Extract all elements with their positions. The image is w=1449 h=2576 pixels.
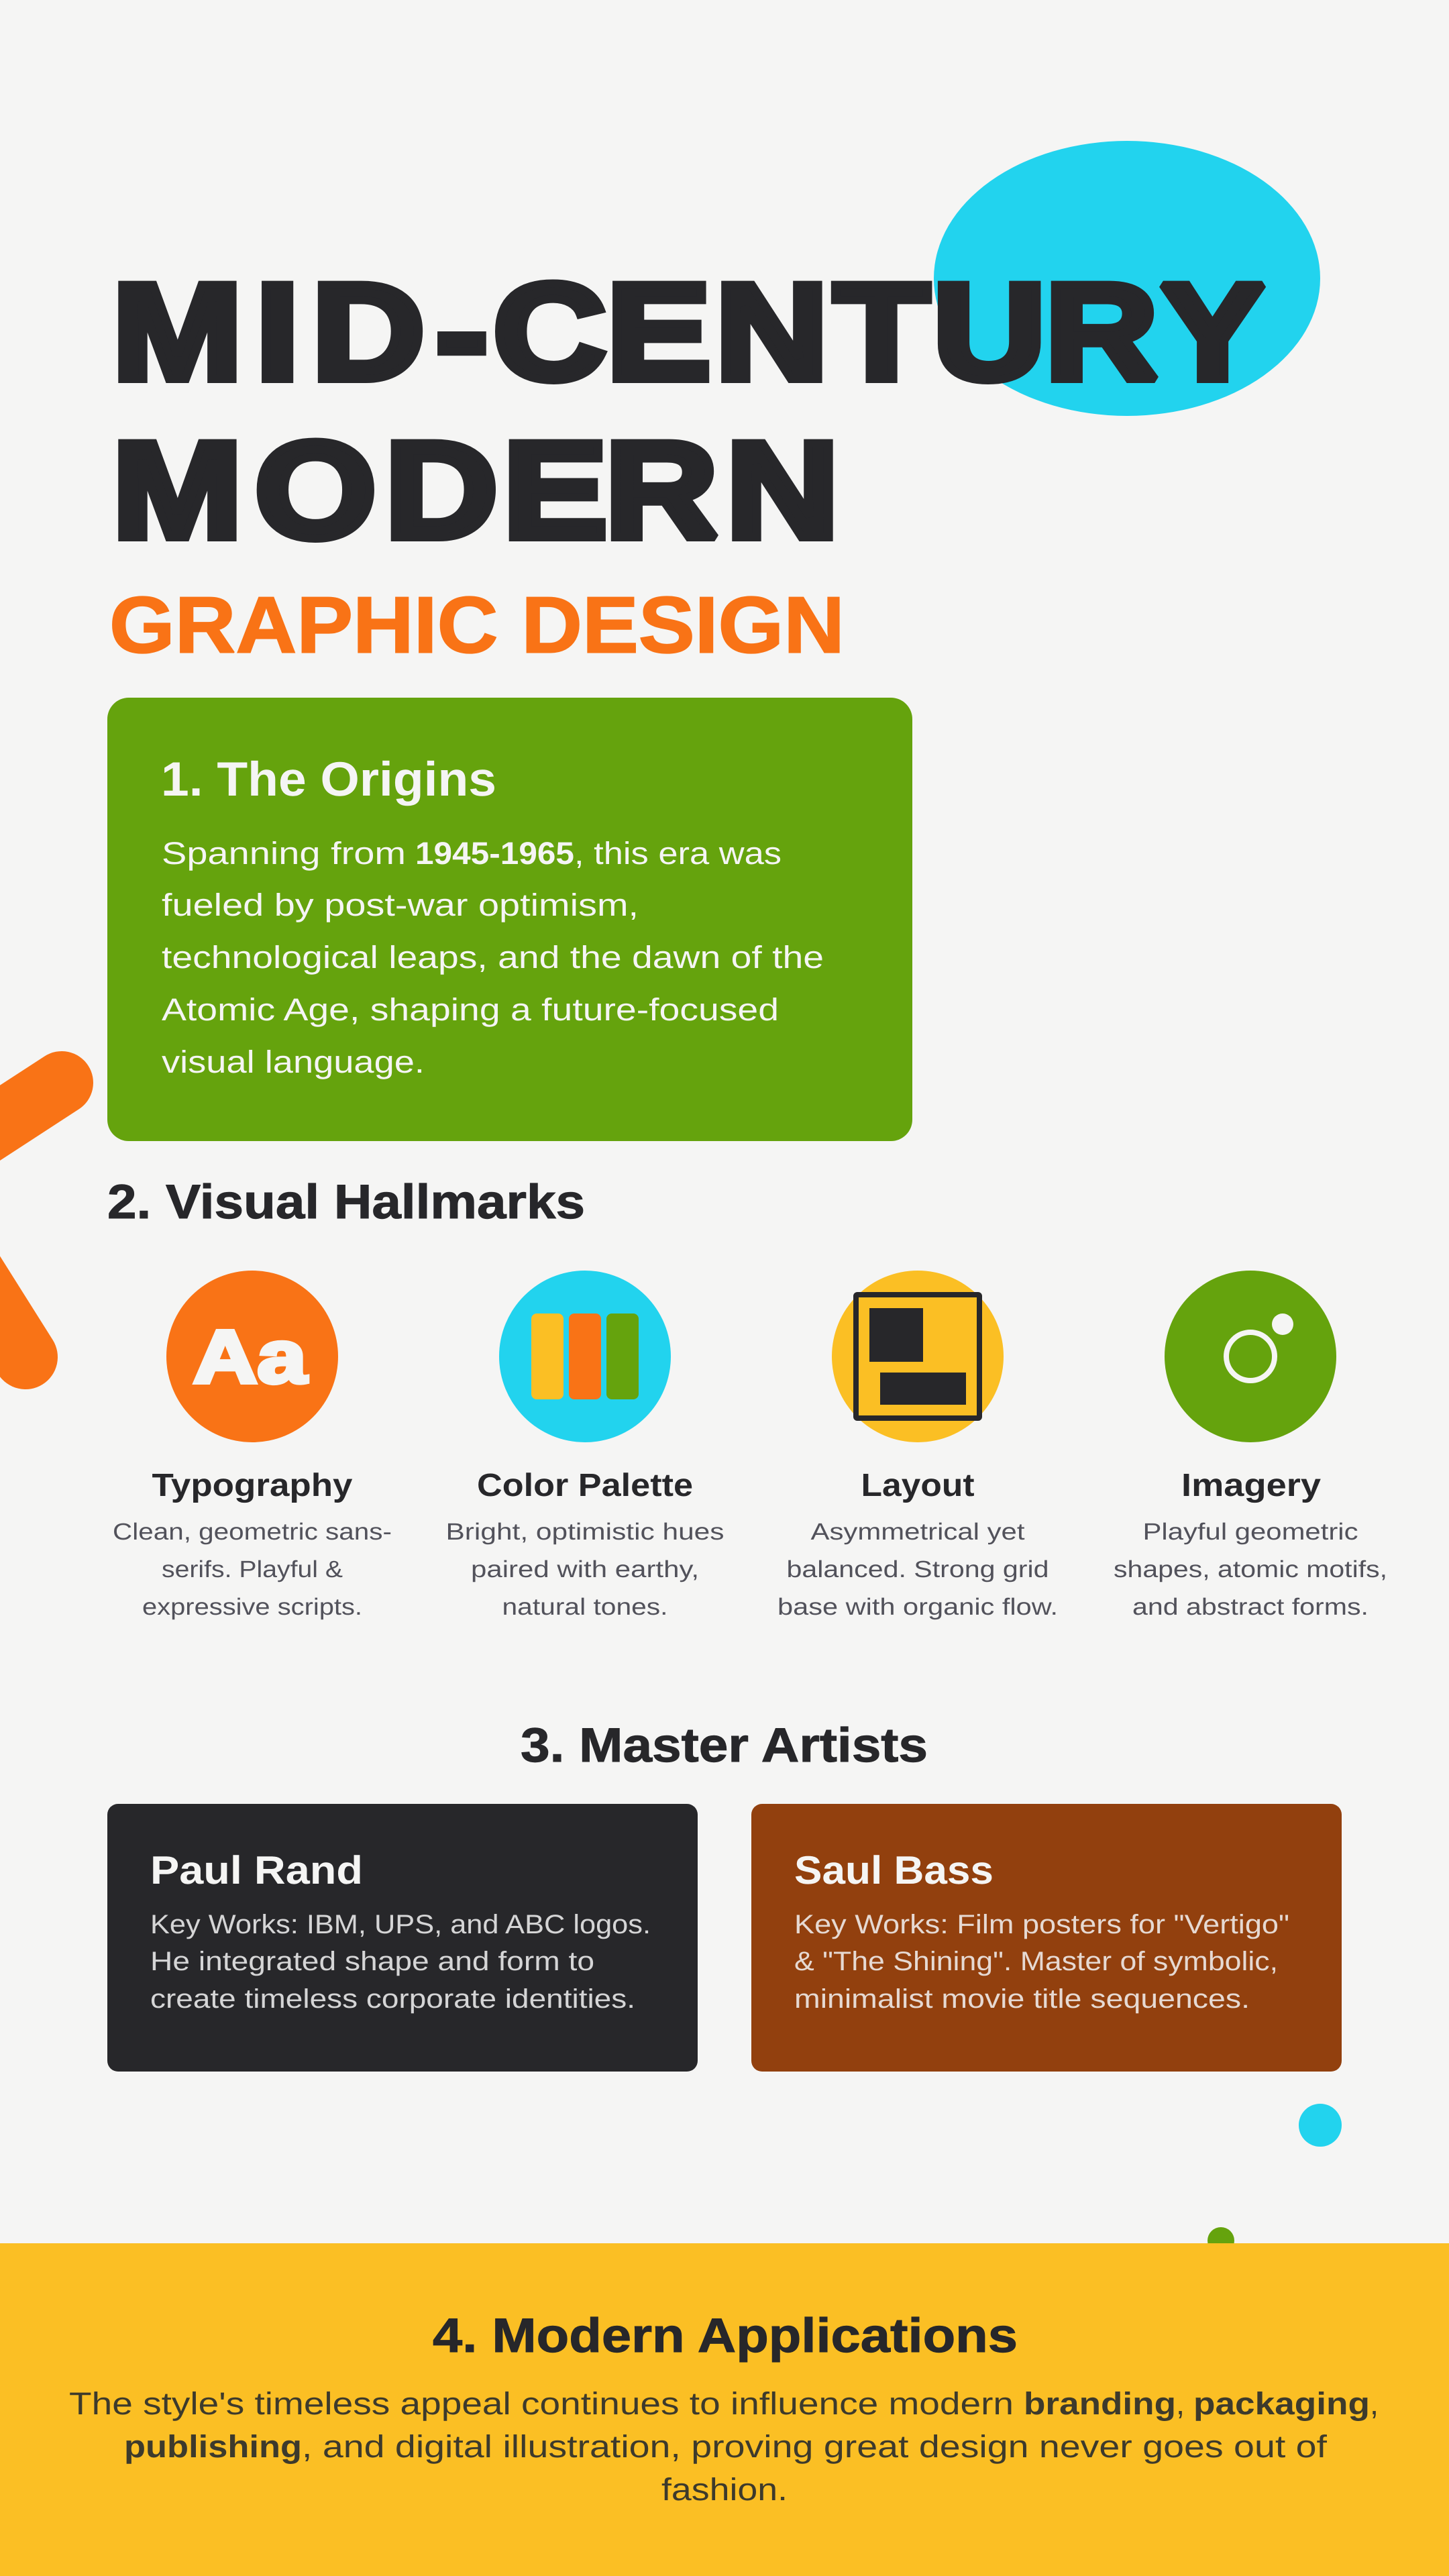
applications body text: packaging bbox=[1193, 2385, 1370, 2421]
decorative orange starburst arm lower bbox=[0, 1189, 25, 1357]
applications body text: fashion. bbox=[661, 2471, 788, 2507]
description: typography: Clean, geometric sans- bbox=[113, 1519, 392, 1545]
name: paul rand: Paul Rand bbox=[150, 1848, 363, 1892]
description: imagery: and abstract forms. bbox=[1132, 1594, 1368, 1620]
origins body text: Atomic Age, shaping a future-focused bbox=[162, 991, 779, 1027]
bio: paul rand: He integrated shape and form to bbox=[150, 1947, 594, 1976]
origins body text: technological leaps, and the dawn of the bbox=[162, 939, 824, 975]
panel: modern applications bbox=[0, 2243, 1449, 2576]
bio: saul bass bbox=[794, 1910, 1289, 2014]
hallmark: imagery bbox=[1114, 1271, 1387, 1620]
description: imagery: Playful geometric bbox=[1143, 1519, 1358, 1545]
icon: imagery bbox=[1165, 1271, 1336, 1442]
description: layout bbox=[777, 1519, 1058, 1620]
applications body text: publishing bbox=[124, 2428, 302, 2464]
heading: the origins: 1. The Origins bbox=[161, 753, 496, 806]
bio: saul bass: & "The Shining". Master of symbolic, bbox=[794, 1947, 1278, 1976]
bio: paul rand: Key Works: IBM, UPS, and ABC logos. bbox=[150, 1910, 651, 1939]
applications body text: , and digital illustration, proving great design never goes out of bbox=[302, 2428, 1328, 2464]
description: layout: balanced. Strong grid bbox=[786, 1556, 1049, 1582]
origins body text: Spanning from bbox=[162, 835, 406, 871]
applications body text bbox=[69, 2385, 1379, 2507]
label: typography: Typography bbox=[152, 1468, 353, 1503]
title: MODERN bbox=[113, 414, 839, 567]
decorative cyan dot bbox=[1299, 2104, 1342, 2147]
hallmark: color palette bbox=[445, 1271, 724, 1620]
decorative green dot bbox=[1208, 2227, 1234, 2254]
panel: saul bass bbox=[751, 1804, 1342, 2072]
description: color palette bbox=[445, 1519, 724, 1620]
description: typography: expressive scripts. bbox=[142, 1594, 362, 1620]
panel: paul rand bbox=[107, 1804, 698, 2072]
description: imagery: shapes, atomic motifs, bbox=[1114, 1556, 1387, 1582]
description: typography: serifs. Playful & bbox=[162, 1556, 343, 1582]
panel: the origins bbox=[107, 698, 912, 1141]
description: color palette: Bright, optimistic hues bbox=[445, 1519, 724, 1545]
bio: saul bass: Key Works: Film posters for "Vertigo" bbox=[794, 1910, 1289, 1939]
bio: paul rand bbox=[150, 1910, 651, 2014]
hallmark: layout bbox=[777, 1271, 1058, 1620]
applications body text: , bbox=[1176, 2385, 1185, 2421]
description: color palette: paired with earthy, bbox=[471, 1556, 699, 1582]
applications body text: , bbox=[1370, 2385, 1379, 2421]
label: color palette: Color Palette bbox=[477, 1468, 693, 1503]
label: imagery: Imagery bbox=[1181, 1468, 1321, 1503]
heading: visual hallmarks: 2. Visual Hallmarks bbox=[107, 1175, 585, 1229]
subtitle: GRAPHIC DESIGN bbox=[109, 581, 845, 669]
heading: master artists: 3. Master Artists bbox=[521, 1719, 928, 1772]
icon: typography: Aa bbox=[193, 1315, 307, 1399]
icon: layout bbox=[832, 1271, 1004, 1442]
origins body text: 1945-1965 bbox=[415, 835, 574, 871]
origins body text: fueled by post-war optimism, bbox=[162, 887, 639, 922]
heading: modern applications: 4. Modern Applications bbox=[433, 2309, 1018, 2363]
applications body text: branding bbox=[1024, 2385, 1176, 2421]
bio: paul rand: create timeless corporate identities. bbox=[150, 1984, 635, 2014]
title: MID-CENTURY bbox=[113, 256, 1265, 409]
bio: saul bass: minimalist movie title sequences. bbox=[794, 1984, 1250, 2014]
name: saul bass: Saul Bass bbox=[794, 1848, 994, 1892]
description: layout: Asymmetrical yet bbox=[810, 1519, 1025, 1545]
description: color palette: natural tones. bbox=[502, 1594, 668, 1620]
origins body text: , this era was bbox=[574, 835, 782, 871]
origins body text bbox=[162, 835, 824, 1079]
description: layout: base with organic flow. bbox=[777, 1594, 1058, 1620]
decorative cyan ellipse bbox=[934, 141, 1320, 416]
icon: color palette bbox=[499, 1271, 671, 1442]
description: typography bbox=[113, 1519, 392, 1620]
label: layout: Layout bbox=[861, 1468, 975, 1503]
title bbox=[113, 256, 1265, 567]
hallmark: typography bbox=[113, 1271, 392, 1620]
decorative orange starburst arm upper bbox=[0, 1083, 62, 1175]
icon: typography bbox=[166, 1271, 338, 1442]
origins body text: visual language. bbox=[162, 1044, 425, 1079]
description: imagery bbox=[1114, 1519, 1387, 1620]
applications body text: The style's timeless appeal continues to influence modern bbox=[69, 2385, 1014, 2421]
